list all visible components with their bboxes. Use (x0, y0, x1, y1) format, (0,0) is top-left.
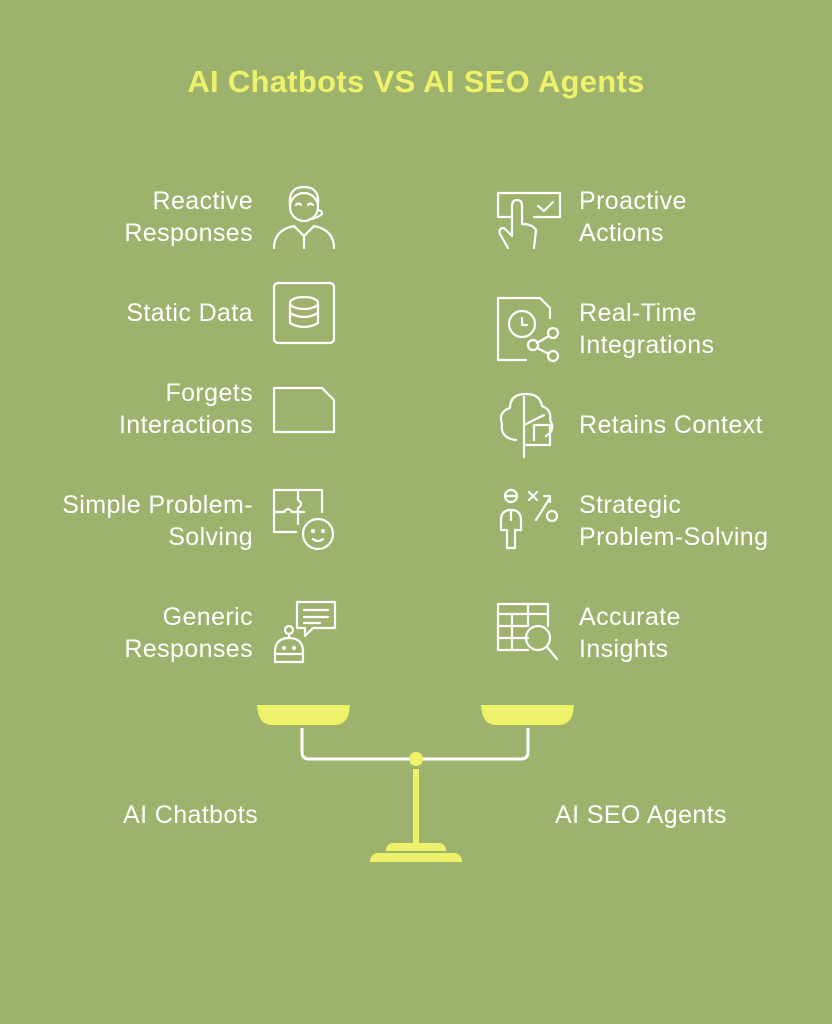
text: Accurate Insights: Accurate (579, 603, 681, 631)
icon: tree (501, 394, 552, 457)
text: Simple Problem-Solving: Simple Problem- (62, 491, 253, 519)
label: AI Chatbots: AI Chatbots (123, 801, 258, 829)
text: Accurate Insights (579, 603, 681, 663)
text: Forgets Interactions (119, 379, 253, 439)
icon: touch check (498, 193, 560, 248)
label: AI SEO Agents: AI SEO Agents (555, 801, 727, 829)
text: Real-Time Integrations: Real-Time (579, 299, 697, 327)
text: Strategic Problem-Solving (579, 491, 768, 551)
text: Accurate Insights: Insights (579, 635, 668, 663)
icon: puzzle face (274, 490, 333, 549)
icon: strategy (501, 490, 557, 548)
icon: clock doc share (498, 298, 558, 361)
text: Real-Time Integrations (579, 299, 714, 359)
text: Strategic Problem-Solving: Problem-Solving (579, 523, 768, 551)
title: AI Chatbots VS AI SEO Agents (187, 64, 645, 99)
text: Proactive Actions: Actions (579, 219, 664, 247)
text: Retains Context: Retains Context (579, 411, 763, 439)
icon: support agent (274, 187, 334, 248)
text: Reactive Responses (124, 187, 253, 247)
text: Real-Time Integrations: Integrations (579, 331, 714, 359)
text: Strategic Problem-Solving: Strategic (579, 491, 681, 519)
text: Proactive Actions (579, 187, 687, 247)
text: Static Data: Static Data (126, 299, 253, 327)
text: Reactive Responses: Reactive (153, 187, 253, 215)
text: Generic Responses: Generic (163, 603, 253, 631)
text: Generic Responses (124, 603, 253, 663)
text: Forgets Interactions: Interactions (119, 411, 253, 439)
icon: database (274, 283, 334, 343)
text: Reactive Responses: Responses (124, 219, 253, 247)
icon: table search (498, 604, 557, 659)
text: Generic Responses: Responses (124, 635, 253, 663)
text: Simple Problem-Solving: Solving (168, 523, 253, 551)
text: Proactive Actions: Proactive (579, 187, 687, 215)
icon: card (274, 388, 334, 432)
text: Forgets Interactions: Forgets (165, 379, 253, 407)
text: Simple Problem-Solving (62, 491, 253, 551)
icon: bot chat (275, 602, 335, 662)
